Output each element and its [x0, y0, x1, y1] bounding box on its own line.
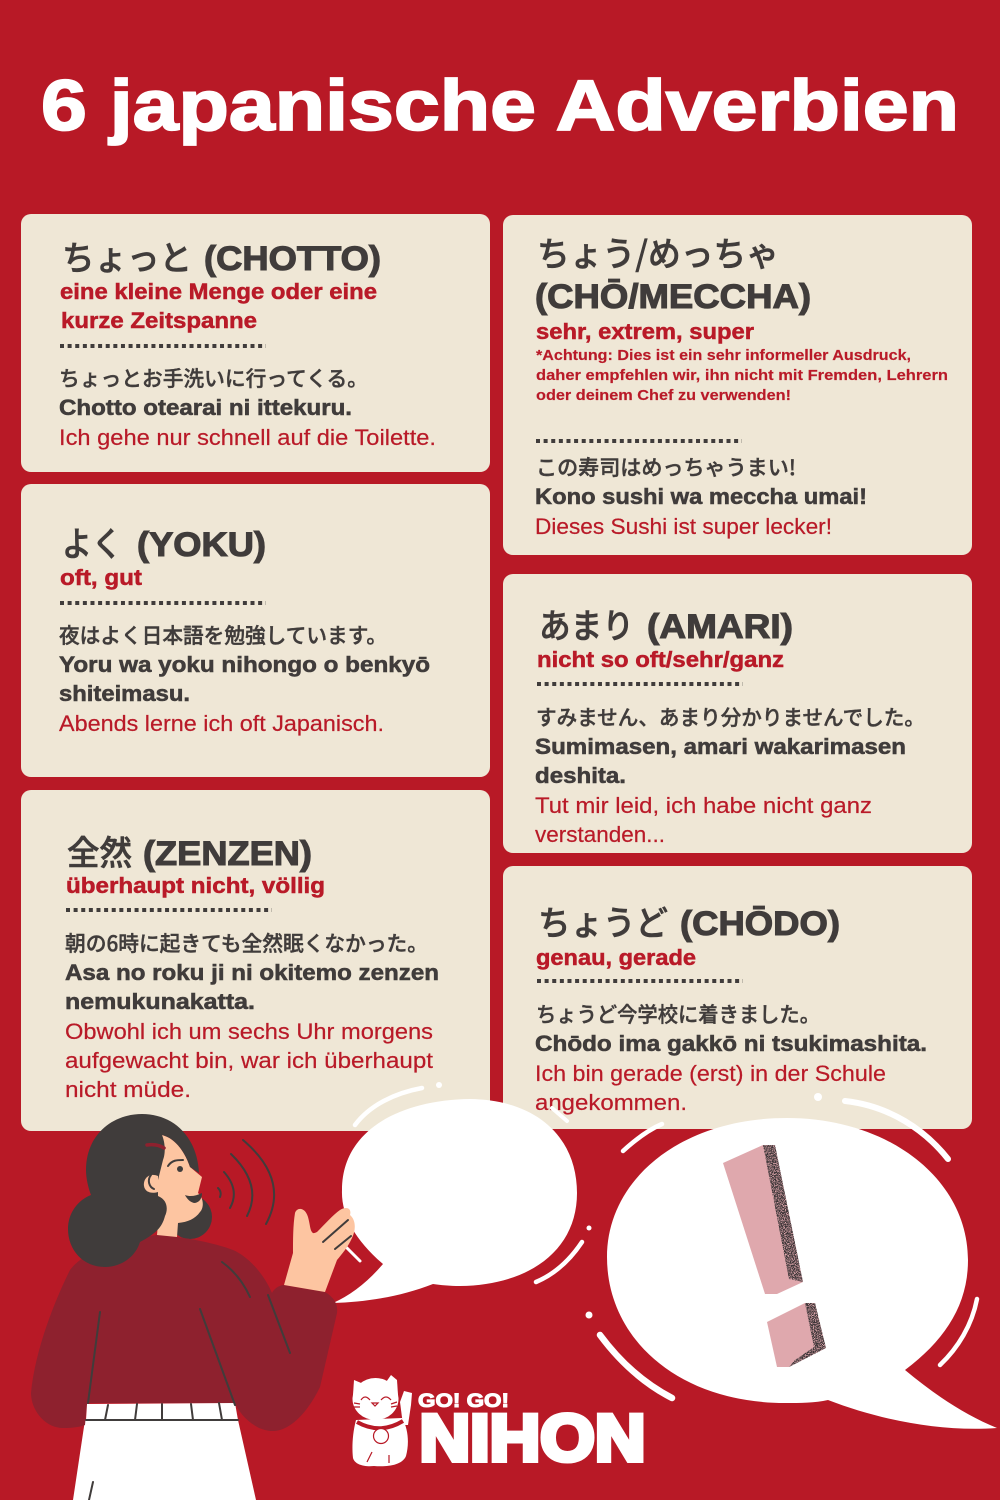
heading: zenzen: 全然	[67, 826, 132, 875]
heading: chodo: (CHŌDO)	[680, 905, 840, 943]
panel: amari	[503, 574, 972, 853]
example: chotto: Chotto otearai ni ittekuru.	[59, 395, 352, 420]
icon: exclamation mark	[723, 1145, 826, 1367]
warning note: *Achtung: Dies ist ein sehr informeller Ausdruck,	[536, 348, 911, 364]
heading: cho/meccha: ちょう/めっちゃ	[537, 227, 779, 276]
meaning: chodo: genau, gerade	[536, 945, 696, 970]
heading: chodo: ちょうど	[538, 896, 668, 945]
heading: amari: あまり	[539, 599, 634, 648]
waistband	[86, 1403, 238, 1420]
sound waves	[218, 1140, 274, 1224]
heading: chotto: (CHOTTO)	[204, 240, 381, 278]
example: amari: Sumimasen, amari wakarimasen	[535, 734, 906, 759]
face and neck	[150, 1135, 203, 1237]
heading: yoku	[62, 517, 266, 566]
heading: cho/meccha: (CHŌ/MECCHA)	[535, 278, 811, 316]
heading: chotto: ちょっと	[62, 231, 192, 280]
example: zenzen	[65, 928, 439, 1102]
example: cho/meccha: この寿司はめっちゃうまい!	[536, 452, 796, 482]
meaning: chotto: eine kleine Menge oder eine	[60, 279, 377, 304]
example: chodo: angekommen.	[535, 1090, 687, 1115]
example: chotto	[59, 363, 436, 450]
meaning: yoku: oft, gut	[60, 565, 143, 590]
raised hand	[284, 1208, 355, 1292]
warning note: oder deinem Chef zu verwenden!	[536, 388, 791, 404]
hair clip	[147, 1145, 164, 1148]
example: yoku: shiteimasu.	[59, 681, 190, 706]
example: amari: verstanden...	[535, 822, 665, 847]
eye and brow	[168, 1160, 183, 1172]
warning note: daher empfehlen wir, ihn nicht mit Fremden, Lehrern	[536, 368, 948, 384]
sweater fold lines	[88, 1262, 290, 1405]
skirt	[73, 1420, 256, 1500]
heading: yoku: よく	[62, 517, 122, 566]
meaning: amari: nicht so oft/sehr/ganz	[537, 647, 784, 672]
sweater	[31, 1235, 337, 1431]
example: chodo: Ich bin gerade (erst) in der Schule	[535, 1061, 886, 1086]
example: chotto: Ich gehe nur schnell auf die Toilette.	[59, 425, 436, 450]
mouth	[185, 1193, 202, 1203]
logo text: nihon: NIHON	[420, 1400, 646, 1474]
heading: amari: (AMARI)	[647, 608, 793, 646]
meaning: zenzen: überhaupt nicht, völlig	[66, 873, 325, 898]
example: chodo: Chōdo ima gakkō ni tsukimashita.	[535, 1031, 927, 1056]
speech bubble: left	[333, 1082, 592, 1303]
panel: zenzen	[21, 790, 490, 1131]
example: yoku: Yoru wa yoku nihongo o benkyō	[59, 652, 430, 677]
example: cho/meccha: Dieses Sushi ist super lecker!	[535, 514, 832, 539]
panel: cho/meccha	[503, 215, 972, 555]
example: zenzen: nemukunakatta.	[65, 989, 255, 1014]
example: amari: deshita.	[535, 763, 626, 788]
example: chodo	[535, 999, 927, 1115]
heading: amari	[539, 599, 793, 648]
ear	[144, 1175, 158, 1193]
heading: chodo	[538, 896, 840, 945]
example: amari: すみません、あまり分かりませんでした。	[536, 702, 925, 732]
back hair right	[168, 1195, 212, 1239]
example: zenzen: nicht müde.	[65, 1077, 191, 1102]
example: yoku: 夜はよく日本語を勉強しています。	[59, 620, 387, 650]
example: cho/meccha: Kono sushi wa meccha umai!	[535, 484, 867, 509]
illustration: woman speaking	[31, 1114, 355, 1500]
example: chodo: ちょうど今学校に着きました。	[536, 999, 820, 1029]
heading: zenzen: (ZENZEN)	[143, 835, 312, 873]
heading: cho/meccha	[535, 227, 811, 316]
logo text: go go: GO! GO!	[418, 1391, 509, 1412]
panel: chotto	[21, 214, 490, 472]
title: 6 japanische Adverbien	[41, 67, 959, 146]
example: yoku	[59, 620, 430, 736]
example: cho/meccha	[535, 452, 867, 539]
panel: yoku	[21, 484, 490, 777]
example: yoku: Abends lerne ich oft Japanisch.	[59, 711, 384, 736]
example: amari: Tut mir leid, ich habe nicht ganz	[535, 793, 872, 818]
heading: chotto	[62, 231, 381, 280]
icon: lucky cat	[352, 1375, 412, 1466]
panel: chodo	[503, 866, 972, 1129]
logo: Go! Go! Nihon	[352, 1375, 646, 1474]
example: zenzen: Obwohl ich um sechs Uhr morgens	[65, 1019, 433, 1044]
example: zenzen: Asa no roku ji ni okitemo zenzen	[65, 960, 439, 985]
example: zenzen: aufgewacht bin, war ich überhaupt	[65, 1048, 433, 1073]
hair	[68, 1114, 199, 1267]
example: amari	[535, 702, 925, 847]
speech bubble: right with exclamation mark	[586, 1093, 997, 1429]
meaning: chotto	[60, 279, 377, 333]
example: chotto: ちょっとお手洗いに行ってくる。	[59, 363, 368, 393]
example: zenzen: 朝の6時に起きても全然眠くなかった。	[65, 928, 428, 958]
warning note	[536, 348, 948, 404]
heading: yoku: (YOKU)	[137, 526, 266, 564]
meaning: chotto: kurze Zeitspanne	[61, 308, 257, 333]
meaning: cho/meccha: sehr, extrem, super	[536, 319, 754, 344]
heading: zenzen	[67, 826, 312, 875]
